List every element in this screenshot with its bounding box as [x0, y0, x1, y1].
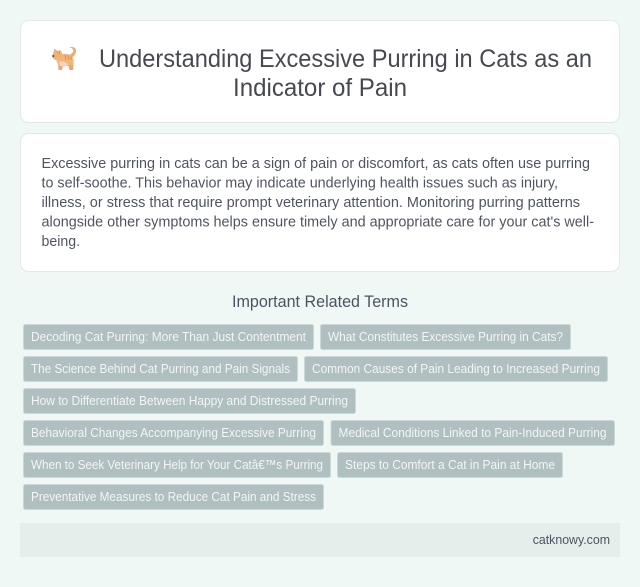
- text block: description: [42, 155, 594, 250]
- chip: comfort: Steps to Comfort a Cat in Pain at Home: [345, 457, 555, 472]
- text block: description: to self-soothe. This behavior may indicate underlying health issues such as injury,: [42, 174, 558, 192]
- chip: medical conditions: [331, 420, 614, 446]
- text block: description: being.: [42, 233, 80, 250]
- panel: title card: [20, 20, 620, 122]
- chip: excessive purring: What Constitutes Excessive Purring in Cats?: [328, 329, 563, 344]
- chip: common causes: Common Causes of Pain Leading to Increased Purring: [312, 361, 600, 376]
- chip: science: [24, 356, 298, 382]
- icon: cat: [52, 47, 76, 70]
- heading: Important Related Terms: Important Related Terms: [232, 293, 408, 311]
- panel: related terms chips: [24, 324, 614, 510]
- chip: medical conditions: Medical Conditions Linked to Pain-Induced Purring: [338, 425, 606, 440]
- heading: title: Indicator of Pain: [233, 74, 407, 102]
- chip: excessive purring: [320, 324, 570, 350]
- chip: veterinary help: [24, 452, 330, 478]
- chip: science: The Science Behind Cat Purring and Pain Signals: [31, 361, 290, 376]
- chip: behavioral changes: Behavioral Changes Accompanying Excessive Purring: [31, 425, 316, 440]
- chip: preventative: Preventative Measures to Reduce Cat Pain and Stress: [31, 489, 316, 504]
- chip: common causes: [304, 356, 608, 382]
- chip: behavioral changes: [24, 420, 324, 446]
- footer: [20, 523, 620, 557]
- text block: description: alongside other symptoms helps ensure timely and appropriate care for your cat's well-: [42, 214, 594, 230]
- heading: title: [99, 45, 592, 102]
- chip: comfort: [338, 452, 562, 478]
- chip: decoding cat purring: Decoding Cat Purring: More Than Just Contentment: [31, 329, 306, 344]
- chip: decoding cat purring: [24, 324, 314, 350]
- chip: differentiate: [24, 388, 356, 414]
- footer: catknowy.com: [533, 532, 610, 547]
- chip: differentiate: How to Differentiate Between Happy and Distressed Purring: [31, 393, 348, 408]
- chip: veterinary help: When to Seek Veterinary Help for Your Catâ€™s Purring: [31, 457, 323, 472]
- text block: description: illness, or stress that require prompt veterinary attention. Monitoring purring patterns: [42, 194, 580, 211]
- heading: title: Understanding Excessive Purring in Cats as an: [99, 45, 592, 73]
- chip: preventative: [24, 484, 324, 510]
- panel: description card: [20, 134, 620, 272]
- text block: description: Excessive purring in cats can be a sign of pain or discomfort, as cats often use purring: [42, 155, 590, 172]
